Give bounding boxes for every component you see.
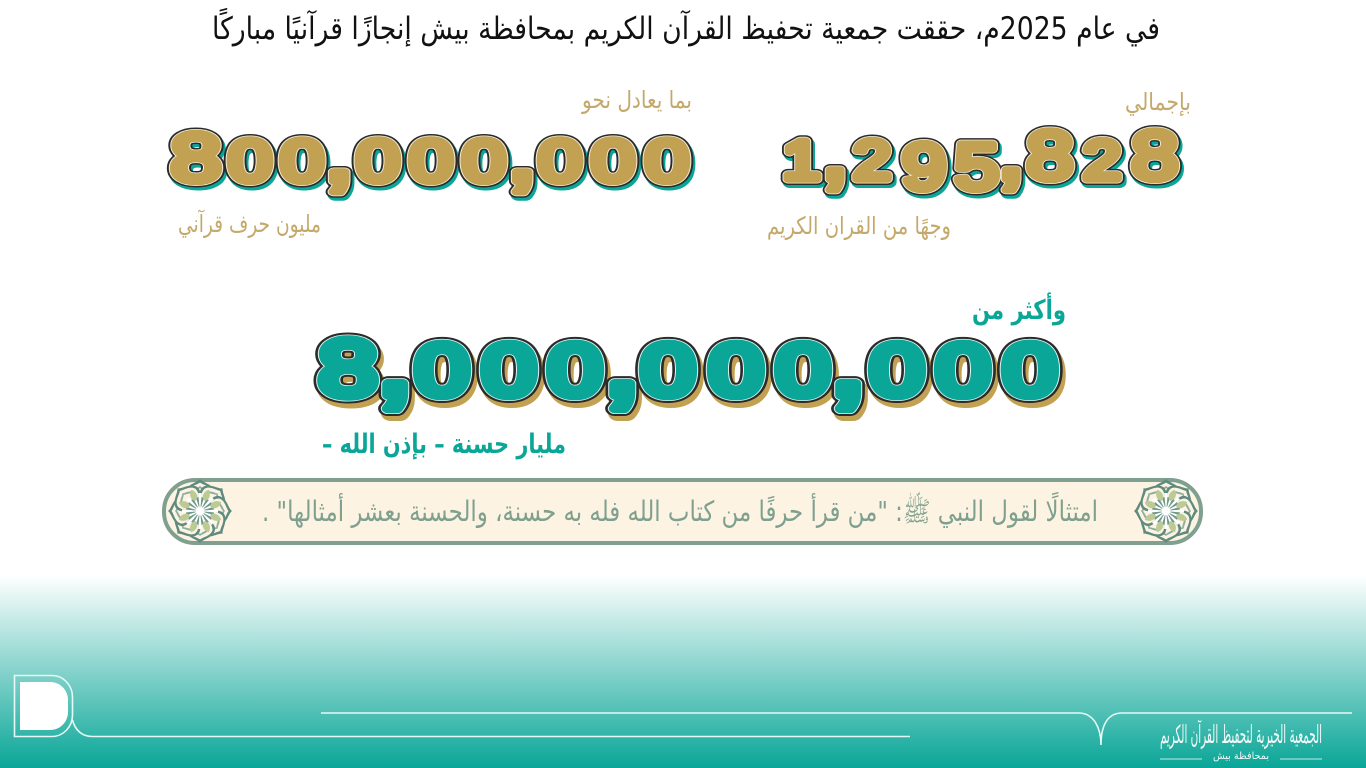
number: 1,295,828: 1,295,828	[785, 106, 1180, 206]
number: 1,295,828: 1,295,828	[783, 103, 1178, 203]
number: 800,000,000: 800,000,000	[171, 105, 688, 199]
banner background	[164, 480, 1201, 543]
number: 800,000,000: 800,000,000	[173, 108, 690, 202]
number: 8,000,000,000: 8,000,000,000	[319, 300, 1057, 418]
number: 1,295,828: 1,295,828	[783, 103, 1178, 203]
number: 1,295,828: 1,295,828	[783, 103, 1178, 203]
number: 8,000,000,000: 8,000,000,000	[319, 300, 1057, 418]
stat: letters count	[171, 86, 692, 238]
icon: right rosette	[1133, 478, 1199, 544]
hadith banner	[164, 478, 1201, 544]
label: more than: وأكثر من	[972, 292, 1066, 326]
label: pages of the Quran: وجهًا من القران الكريم	[767, 212, 951, 240]
label: total: بإجمالي	[1125, 88, 1191, 117]
decorative bracket line	[321, 713, 1352, 745]
icon: left rosette	[167, 478, 233, 544]
title: في عام 2025م، حققت جمعية تحفيظ القرآن الكريم بمحافظة بيش إنجازًا قرآنيًا مباركًا	[212, 8, 1160, 47]
number: 8,000,000,000: 8,000,000,000	[322, 305, 1060, 423]
label: billion good deeds: مليار حسنة – بإذن الله –	[322, 429, 566, 460]
logo location: بمحافظة بيش	[1213, 751, 1269, 762]
stat: pages count	[767, 88, 1191, 240]
number: 8,000,000,000: 8,000,000,000	[319, 300, 1057, 418]
number: 800,000,000: 800,000,000	[171, 105, 688, 199]
label: equivalent to: بما يعادل نحو	[581, 86, 692, 114]
icon: D logo with line	[14, 676, 910, 736]
label: million Quranic letters: مليون حرف قرآني	[178, 209, 321, 238]
hadith text: امتثالًا لقول النبي ﷺ: "من قرأ حرفًا من كتاب الله فله به حسنة، والحسنة بعشر أمثالها" .	[262, 491, 1098, 528]
stat: rewards count	[319, 292, 1066, 460]
number: 800,000,000: 800,000,000	[171, 105, 688, 199]
association logo	[1160, 719, 1322, 762]
